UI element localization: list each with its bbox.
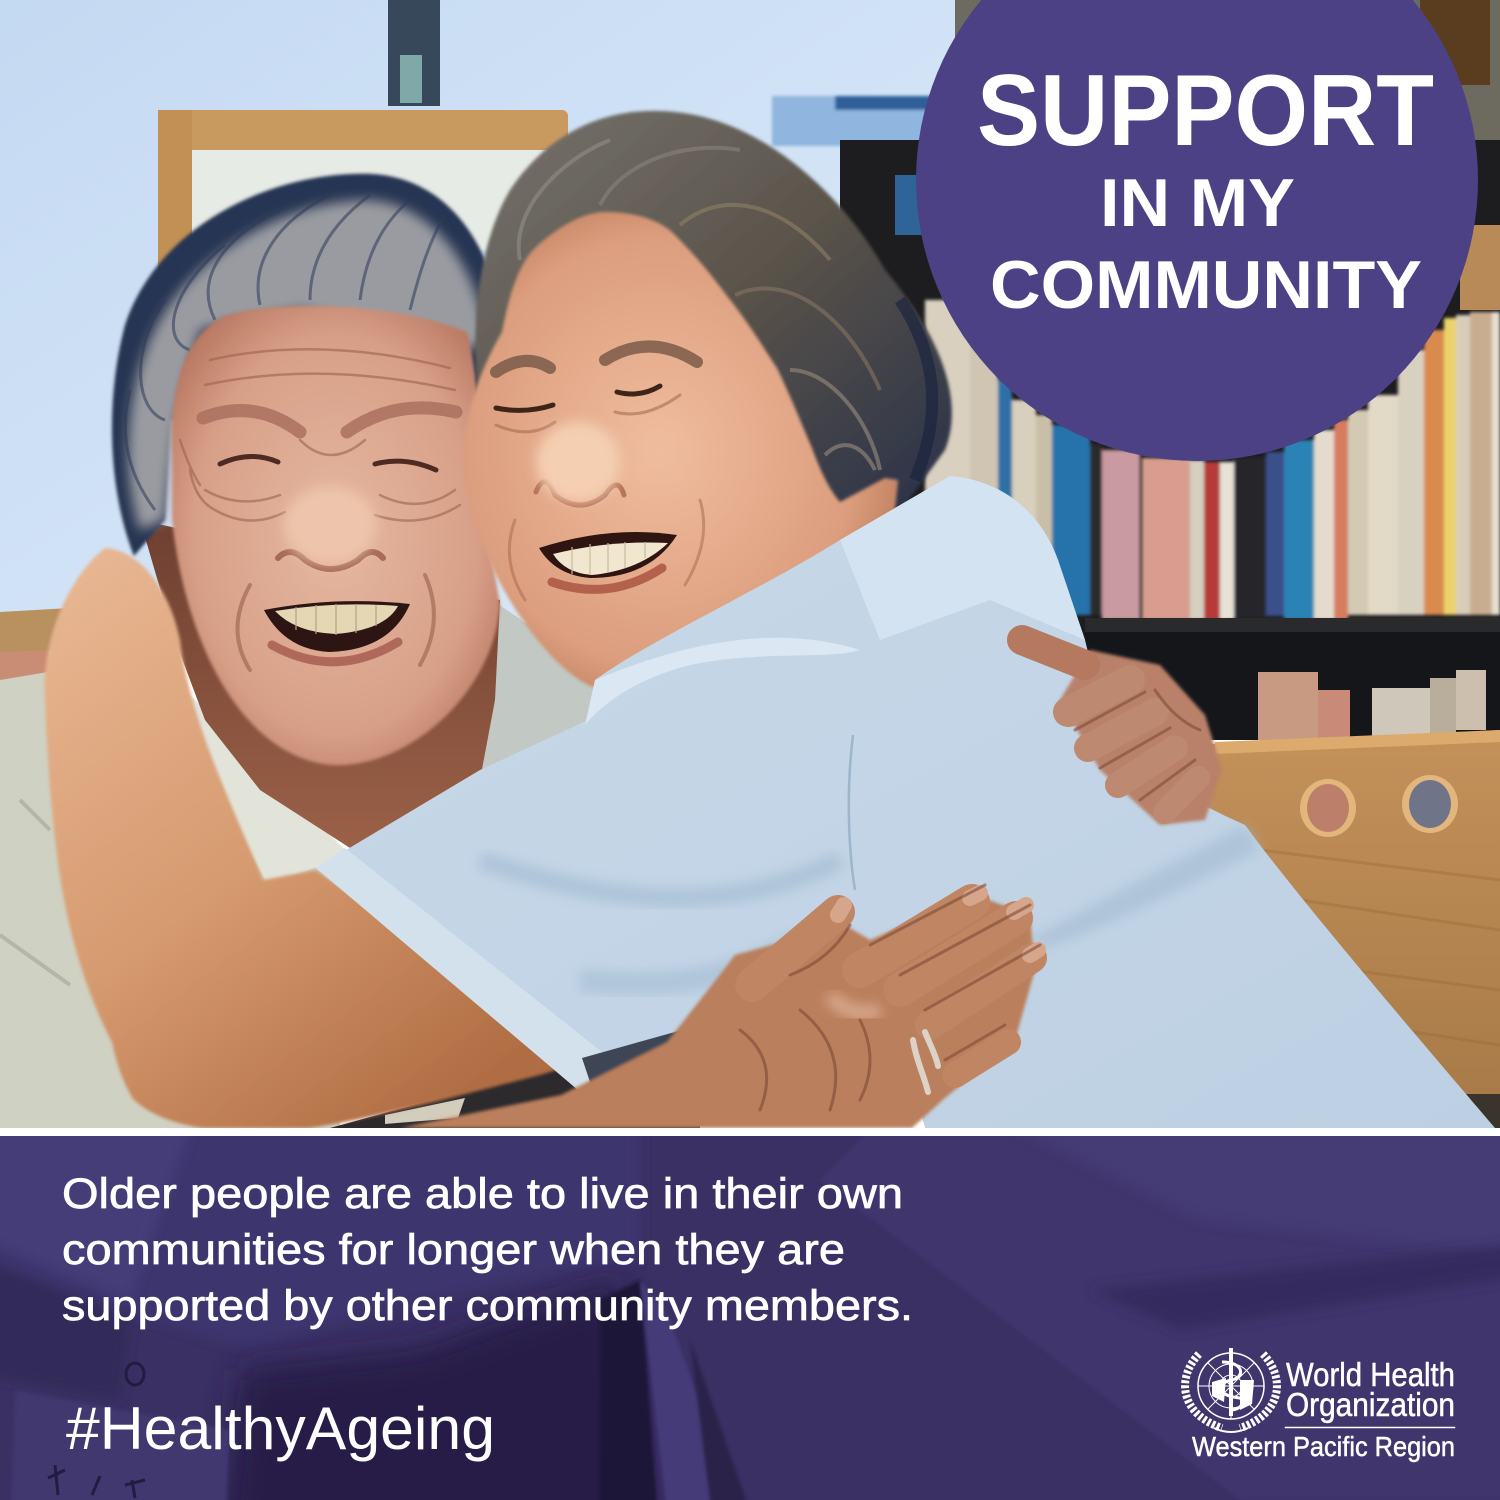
blue objects on shelf <box>772 96 937 146</box>
hashtag: #HealthyAgeing <box>66 1395 495 1462</box>
left woman smile <box>264 601 410 662</box>
title text <box>977 55 1434 323</box>
dark gap under sleeve <box>582 1031 678 1082</box>
dark gap under arms <box>330 1068 700 1128</box>
logo wordmark: Organization <box>1286 1386 1455 1423</box>
white divider band <box>0 1128 1500 1136</box>
left woman hair <box>112 174 502 556</box>
right woman face <box>463 212 898 689</box>
left woman neck <box>140 520 500 848</box>
window background <box>0 0 960 620</box>
body text: Older people are able to live in their own <box>62 1170 903 1218</box>
right woman smile <box>539 532 677 589</box>
body text: communities for longer when they are <box>62 1226 845 1274</box>
right woman lower forearm and hand <box>400 885 1040 1128</box>
ring <box>913 1032 938 1092</box>
WHO logo <box>1185 1348 1455 1462</box>
left woman face <box>172 306 500 765</box>
body text <box>62 1170 913 1330</box>
title text: SUPPORT <box>977 55 1434 167</box>
bottom purple band <box>0 1100 1500 1500</box>
left woman body and shirt <box>0 585 610 1128</box>
wooden bench <box>0 608 1500 1128</box>
photo: two older women embracing <box>0 0 1500 1128</box>
bookshelf <box>840 0 1500 740</box>
icon: WHO emblem <box>1185 1348 1277 1432</box>
left woman hand over shoulder <box>1022 640 1222 825</box>
logo wordmark <box>1192 1356 1455 1462</box>
logo wordmark: Western Pacific Region <box>1192 1431 1455 1462</box>
title text: COMMUNITY <box>990 247 1422 323</box>
left woman raised arm <box>44 548 590 1128</box>
wooden picture frame <box>158 110 568 270</box>
right woman blue shirt <box>316 476 1495 1128</box>
right woman hair <box>475 111 952 520</box>
body text: supported by other community members. <box>62 1282 913 1330</box>
logo wordmark: World Health <box>1286 1356 1455 1393</box>
purple title circle <box>916 0 1478 461</box>
title text: IN MY <box>1100 165 1295 241</box>
sleeve cuff <box>316 848 612 1090</box>
